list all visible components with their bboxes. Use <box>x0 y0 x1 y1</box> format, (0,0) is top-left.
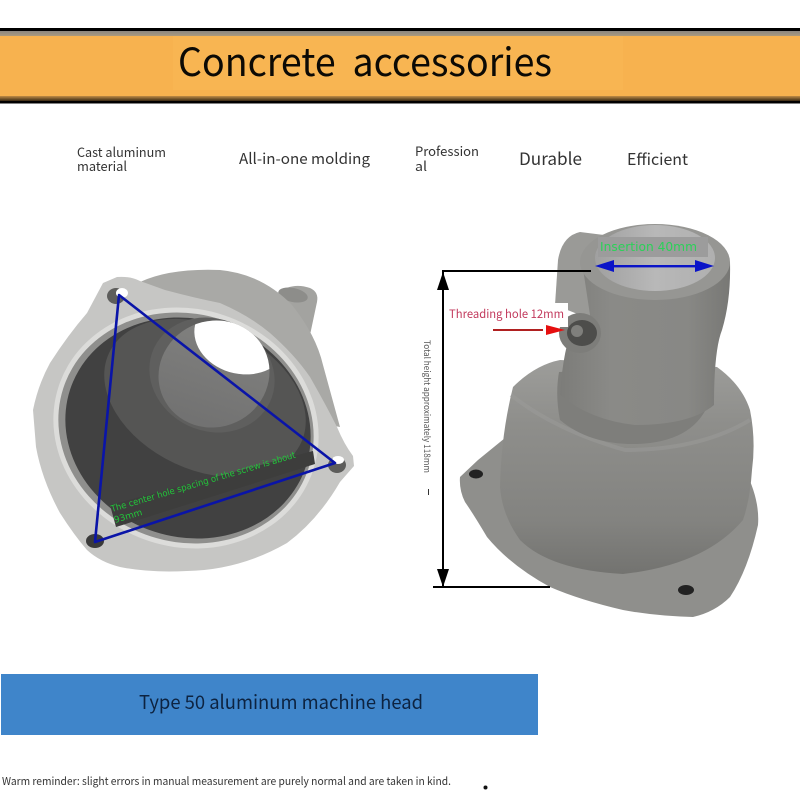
warm reminder note: Warm reminder: slight errors in manual measurement are purely normal and are taken in kind. <box>2 773 451 789</box>
flange <box>33 277 354 572</box>
arrow: insertion width <box>595 260 714 272</box>
rear lug <box>555 232 612 322</box>
product name banner: Type 50 aluminum machine head <box>139 688 423 715</box>
upper neck <box>560 262 730 425</box>
dome body <box>500 360 754 574</box>
inner rim <box>22 273 350 583</box>
product name banner <box>1 674 538 735</box>
callout: hole spacing label: 93mm <box>113 508 144 526</box>
label: cast aluminum material: Cast aluminum <box>77 142 166 161</box>
base flange <box>460 438 758 617</box>
rear body <box>140 270 340 427</box>
label: all-in-one molding: All-in-one molding <box>239 148 371 169</box>
dimension: total height <box>433 270 591 588</box>
screw holes <box>107 288 125 304</box>
callout: threading hole 12mm <box>447 303 568 327</box>
label: professional <box>415 141 479 175</box>
centre tube <box>130 297 294 453</box>
triangle: hole spacing lines <box>95 295 335 542</box>
title: Concrete accessories <box>178 32 552 88</box>
label: cast aluminum material <box>77 142 166 175</box>
stepped shoulder <box>79 288 331 508</box>
dome shoulder highlight <box>511 395 750 450</box>
label: professional: al <box>415 156 427 175</box>
top rim <box>580 224 730 300</box>
arrow: threading hole <box>493 325 565 335</box>
label: cast aluminum material: material <box>77 156 127 175</box>
callout: threading hole 12mm: Threading hole 12mm <box>449 306 564 322</box>
stray mark <box>484 786 488 790</box>
feature labels <box>77 141 688 175</box>
label: durable: Durable <box>519 145 582 170</box>
dark interior <box>36 286 340 570</box>
product photo: underside view <box>22 270 354 583</box>
label: efficient: Efficient <box>627 146 688 170</box>
bore <box>595 225 715 291</box>
mark <box>428 489 429 495</box>
product photo: side view <box>460 224 758 617</box>
mounting holes <box>469 470 483 478</box>
callout: hole spacing label: The center hole spacing of the screw is about <box>109 451 297 515</box>
neck collar <box>557 365 712 444</box>
callout: insertion 40mm: Insertion 40mm <box>600 240 697 254</box>
label: professional: Profession <box>415 141 479 160</box>
threaded hole boss <box>559 313 601 353</box>
lug behind body <box>278 286 317 335</box>
header band <box>0 28 800 104</box>
label: total height: Total height approximately 118mm <box>421 340 433 473</box>
bore opening <box>194 320 270 374</box>
callout: insertion 40mm <box>598 237 708 257</box>
